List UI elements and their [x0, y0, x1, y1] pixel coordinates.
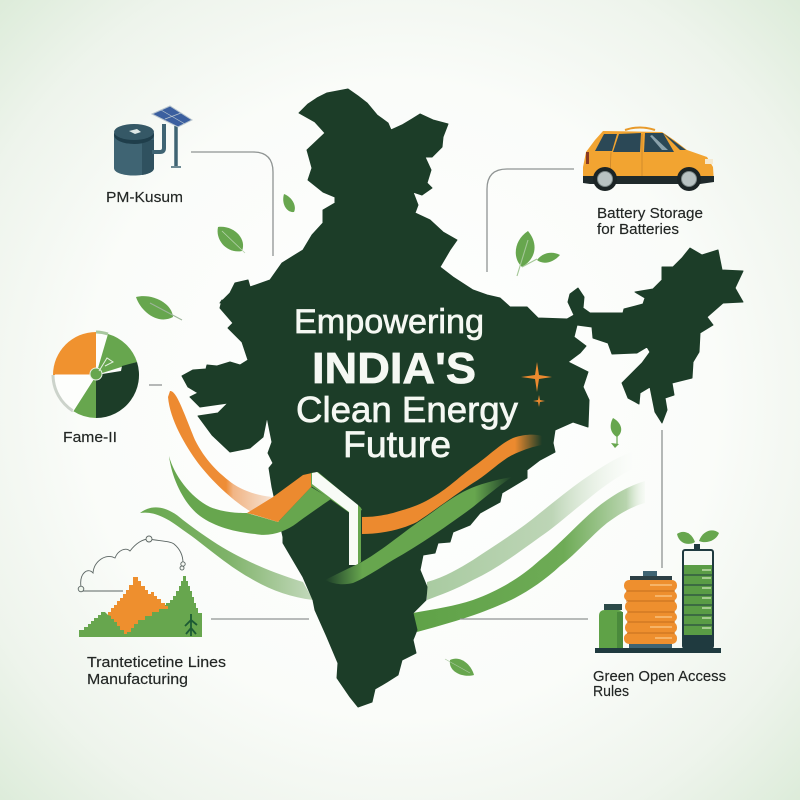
leaf: sprout near east coast [611, 418, 621, 448]
label: Battery Storage for Batteries: Battery Storage [597, 206, 703, 222]
ribbon: green right band [325, 477, 512, 584]
ribbon: chevron [311, 472, 362, 565]
label: Tranteticetine Lines Manufacturing: Manufacturing [87, 672, 188, 688]
ribbon: green left band [169, 456, 331, 535]
icon: stepped mountains with cloud outline [78, 536, 202, 637]
panel: Fame-II [53, 332, 139, 446]
icon: water tank and solar pump [114, 106, 192, 176]
leaf: left [136, 296, 182, 320]
label: PM-Kusum: PM-Kusum [106, 189, 183, 206]
leaf: small upper [283, 194, 295, 212]
connector lines [149, 152, 662, 619]
panel: Green Open Access Rules [593, 530, 726, 700]
icon: segmented dial [53, 332, 139, 418]
title: Clean Energy [296, 389, 519, 430]
ribbons over the map [168, 391, 542, 584]
label: Battery Storage for Batteries: for Batteries [597, 222, 679, 238]
label: Green Open Access Rules: Green Open Access [593, 669, 726, 685]
icon: storage tanks and battery [595, 530, 721, 653]
panel: Tranteticetine Lines Manufacturing [78, 536, 226, 688]
panel: PM-Kusum [106, 106, 192, 206]
ribbons behind the map [140, 452, 645, 632]
title: INDIA'S [312, 344, 476, 393]
ribbon: orange right band [362, 435, 542, 534]
icon: orange car [583, 128, 714, 191]
title [294, 303, 519, 465]
leaves [136, 194, 621, 676]
label: Fame-II: Fame-II [63, 429, 117, 446]
panel: Battery Storage for Batteries [583, 128, 714, 238]
ribbon: orange fold [247, 473, 312, 522]
leaf: near map west [218, 227, 245, 253]
ribbon: orange left band [168, 391, 272, 514]
leaf: bottom [445, 659, 474, 676]
India map [182, 89, 743, 707]
title: Future [343, 424, 451, 465]
label: Tranteticetine Lines Manufacturing: Tranteticetine Lines [87, 655, 226, 671]
icon: orange sparkles [521, 362, 552, 407]
title: Empowering [294, 303, 484, 341]
leaf: pair beside battery line [516, 231, 560, 276]
label: Green Open Access Rules: Rules [593, 684, 629, 700]
